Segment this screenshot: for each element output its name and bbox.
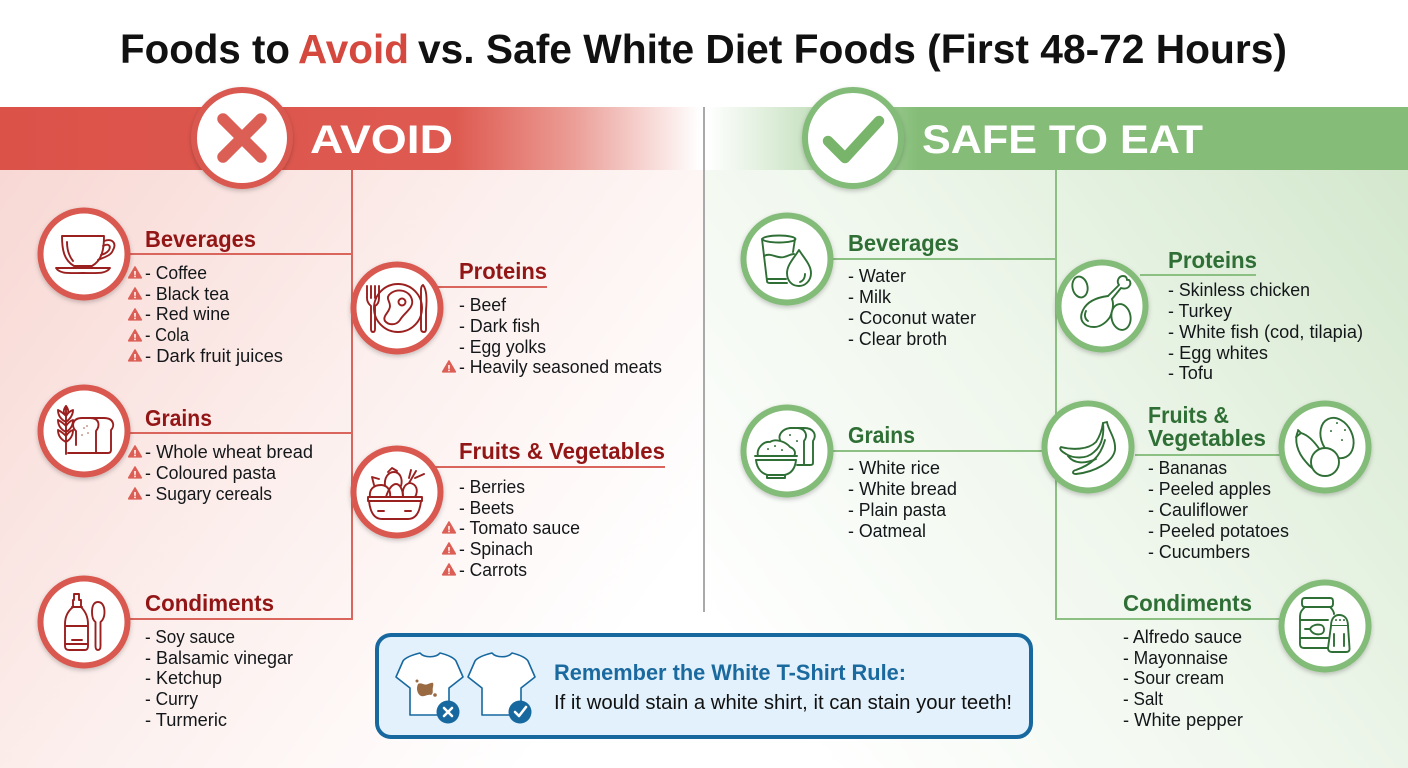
section: avoid grains	[40, 388, 313, 504]
list	[1148, 458, 1289, 562]
background: safe side	[704, 170, 1408, 768]
heading: Grains	[145, 405, 212, 431]
list: - Peeled apples	[1148, 479, 1271, 499]
list: - Spinach	[459, 539, 533, 559]
section: avoid condiments	[40, 578, 293, 730]
list: - Ketchup	[145, 668, 222, 688]
list	[1123, 627, 1243, 730]
heading: Condiments	[145, 590, 274, 616]
title: Avoid	[298, 26, 409, 72]
list: - Carrots	[459, 560, 527, 580]
list: - Salt	[1123, 689, 1163, 709]
connector tree: safe	[833, 170, 1282, 619]
section: safe fruits and vegetables	[1044, 402, 1368, 562]
callout text: If it would stain a white shirt, it can stain your teeth!	[554, 692, 1012, 714]
center divider	[703, 107, 705, 612]
icon: wheat and bread	[40, 388, 128, 474]
list: - Egg yolks	[459, 337, 546, 357]
list: - Milk	[848, 287, 892, 307]
list: - Sour cream	[1123, 668, 1224, 688]
section: avoid fruits and vegetables	[354, 438, 665, 580]
icon: green check	[805, 90, 901, 186]
section: avoid proteins	[354, 258, 662, 377]
list: - Curry	[145, 689, 198, 709]
list: - Coffee	[145, 263, 207, 283]
list: - Skinless chicken	[1168, 280, 1310, 300]
list: - Cola	[145, 325, 190, 345]
list: - White bread	[848, 479, 957, 499]
list	[848, 266, 976, 349]
heading: Proteins	[1168, 247, 1257, 273]
list	[129, 442, 313, 504]
list	[145, 627, 293, 730]
title: Foods to	[120, 26, 290, 72]
list	[443, 477, 580, 580]
background: avoid side	[0, 170, 704, 768]
heading: Fruits &	[1148, 402, 1229, 428]
section: safe grains	[744, 408, 957, 541]
section: avoid beverages	[40, 210, 283, 366]
list	[848, 458, 957, 541]
list: - White rice	[848, 458, 940, 478]
list: - Black tea	[145, 284, 230, 304]
list: - Heavily seasoned meats	[459, 357, 662, 377]
heading: Condiments	[1123, 590, 1252, 616]
banner: safe to eat	[706, 90, 1408, 186]
heading	[1148, 402, 1266, 451]
icon: bananas	[1044, 404, 1132, 490]
list: - Balsamic vinegar	[145, 648, 293, 668]
heading: avoid: AVOID	[310, 118, 453, 162]
heading: safe to eat: SAFE TO EAT	[922, 118, 1203, 162]
list: - Soy sauce	[145, 627, 235, 647]
section: safe proteins	[1058, 247, 1363, 383]
title: vs. Safe White Diet Foods (First 48-72 Hours)	[418, 26, 1287, 72]
list: - White pepper	[1123, 710, 1243, 730]
list: - Dark fish	[459, 316, 540, 336]
heading: Vegetables	[1148, 425, 1266, 451]
heading: Proteins	[459, 258, 547, 284]
section: safe condiments	[1123, 582, 1368, 730]
list	[1168, 280, 1363, 383]
heading: Beverages	[848, 230, 959, 256]
heading: Grains	[848, 422, 915, 448]
list: - Peeled potatoes	[1148, 521, 1289, 541]
icon: red cross	[194, 90, 290, 186]
list: - Egg whites	[1168, 343, 1268, 363]
list: - Beef	[459, 295, 507, 315]
list	[129, 263, 283, 366]
list: - Turmeric	[145, 710, 227, 730]
icon: potato, apple and eggplant	[1282, 404, 1368, 490]
list: - Coloured pasta	[145, 463, 277, 483]
icon: coffee cup	[40, 210, 128, 298]
icon: rice bowl and bread	[744, 408, 830, 494]
icon: jar and salt shaker	[1282, 582, 1368, 670]
list: - Alfredo sauce	[1123, 627, 1242, 647]
icon: glass and water drop	[744, 216, 830, 302]
callout: white t-shirt rule	[377, 635, 1031, 737]
list: - Water	[848, 266, 906, 286]
list: - Sugary cereals	[145, 484, 272, 504]
list: - Mayonnaise	[1123, 648, 1228, 668]
list	[443, 295, 662, 377]
list: - Coconut water	[848, 308, 976, 328]
icon: chicken drumstick and eggs	[1058, 262, 1146, 350]
icon: fruit basket	[354, 448, 440, 536]
list: - Clear broth	[848, 329, 947, 349]
connector tree: avoid	[130, 170, 665, 619]
icon: bottle and spoon	[40, 578, 128, 666]
list: - Dark fruit juices	[145, 346, 283, 366]
list: - Tofu	[1168, 363, 1213, 383]
icon: steak with fork and knife	[354, 264, 440, 352]
callout heading: Remember the White T-Shirt Rule:	[554, 660, 906, 685]
list: - Turkey	[1168, 301, 1232, 321]
banner: avoid	[0, 90, 702, 186]
list: - Berries	[459, 477, 525, 497]
list: - Beets	[459, 498, 514, 518]
list: - Plain pasta	[848, 500, 947, 520]
list: - White fish (cod, tilapia)	[1168, 322, 1363, 342]
list: - Cauliflower	[1148, 500, 1248, 520]
list: - Bananas	[1148, 458, 1227, 478]
list: - Oatmeal	[848, 521, 926, 541]
list: - Tomato sauce	[459, 518, 580, 538]
icon: stained shirt	[396, 653, 463, 724]
list: - Whole wheat bread	[145, 442, 313, 462]
icon: clean shirt	[468, 653, 535, 724]
list: - Cucumbers	[1148, 542, 1250, 562]
list: - Red wine	[145, 304, 230, 324]
section: safe beverages	[744, 216, 976, 349]
heading: Beverages	[145, 226, 256, 252]
heading: Fruits & Vegetables	[459, 438, 665, 464]
